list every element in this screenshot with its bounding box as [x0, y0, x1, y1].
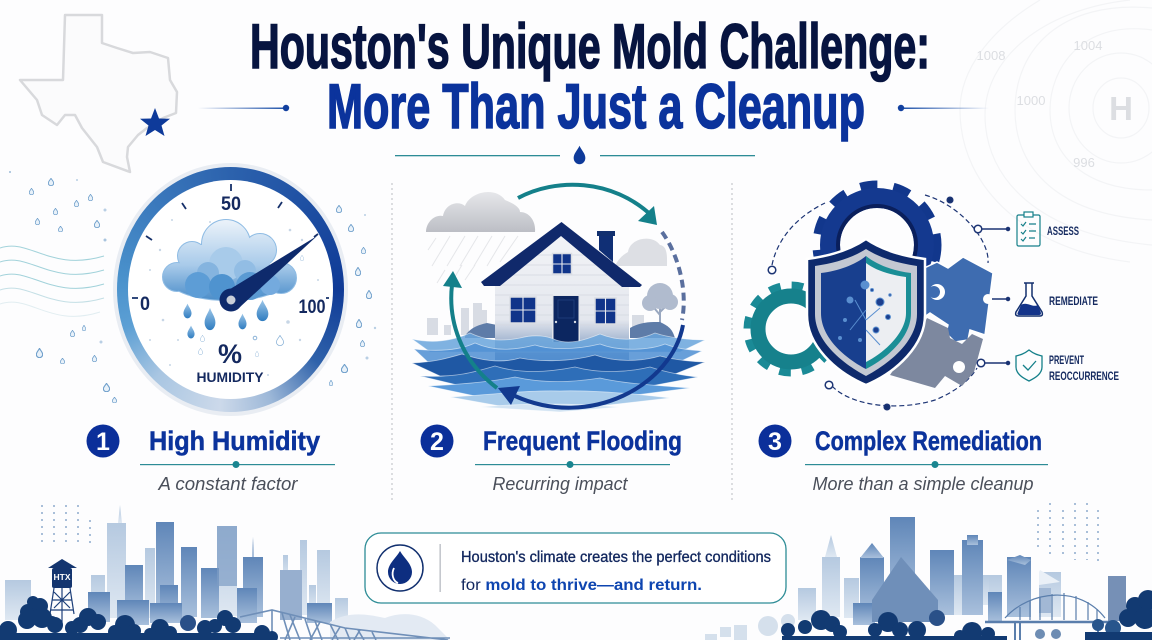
- top teal arrow: [518, 185, 657, 225]
- small cloud and tree: [615, 239, 678, 335]
- right skyline: [705, 517, 1152, 640]
- far hills: [330, 614, 450, 640]
- callout text: [461, 549, 771, 594]
- mid buildings: [853, 517, 1126, 625]
- left teal arrow: [443, 271, 497, 388]
- icon: flask: [1016, 283, 1042, 316]
- process labels: REMEDIATE: [1049, 296, 1098, 308]
- far buildings: [798, 535, 1061, 620]
- number badge 3: [758, 424, 792, 458]
- trees: [0, 596, 278, 640]
- needle: [220, 236, 317, 312]
- dial numbers: [140, 194, 326, 318]
- process labels: PREVENT: [1049, 355, 1084, 367]
- icon: water drop badge: [377, 545, 423, 591]
- bridge: [240, 610, 450, 640]
- teal gear: [750, 288, 832, 370]
- pressure labels: 1004: [1074, 38, 1102, 53]
- dial numbers: 100: [298, 297, 326, 318]
- scattered droplets: [9, 171, 376, 403]
- dial numbers: 0: [140, 294, 150, 315]
- low hills and buildings: [705, 614, 795, 640]
- cycle arrows: [443, 185, 684, 408]
- house: [481, 222, 642, 360]
- water tower HTX: [48, 559, 77, 625]
- rain columns: [42, 503, 1098, 562]
- process labels: ASSESS: [1047, 226, 1079, 238]
- number badge 1: 1: [96, 428, 110, 456]
- subtext 1: A constant factor: [157, 474, 299, 494]
- icon: clipboard: [1017, 212, 1040, 246]
- far buildings: [5, 505, 348, 623]
- puzzle piece gray: [890, 318, 983, 388]
- humidity waves: [0, 246, 104, 316]
- flood water: [412, 333, 705, 412]
- heading 1: High Humidity: [149, 426, 320, 456]
- column dividers: [392, 183, 732, 503]
- dial numbers: 50: [221, 194, 241, 215]
- orbit dashed ring: [772, 195, 988, 406]
- callout divider: [440, 544, 441, 592]
- number badge 1: [86, 424, 120, 458]
- bridge: [985, 593, 1110, 640]
- small droplets: [198, 255, 304, 357]
- pressure labels: 996: [1073, 155, 1095, 170]
- distant city: [427, 303, 644, 335]
- water tower HTX: HTX: [54, 572, 71, 582]
- blue gear: [821, 189, 933, 301]
- number badge 2: [420, 424, 454, 458]
- bottom blue arrow: [498, 325, 683, 408]
- rain: [428, 236, 518, 285]
- texas map with houston star: [20, 15, 177, 172]
- subtext 3: More than a simple cleanup: [812, 474, 1034, 494]
- callout box: [365, 533, 786, 603]
- pressure labels: H: [1109, 90, 1133, 127]
- number badge 2: 2: [430, 428, 444, 456]
- door: [552, 295, 580, 342]
- process labels: REOCCURRENCE: [1049, 371, 1119, 383]
- title flank lines: [198, 105, 989, 111]
- cloud icon: [163, 220, 296, 300]
- rain cloud: [426, 192, 535, 232]
- title divider with drop: [395, 146, 755, 164]
- callout text: Houston's climate creates the perfect conditions: [461, 549, 771, 566]
- pressure labels: [977, 38, 1133, 170]
- title: [250, 12, 930, 142]
- pressure labels: 1000: [1017, 93, 1045, 108]
- left skyline: [0, 505, 450, 640]
- puzzle piece blue: [920, 257, 993, 342]
- percent humidity label: HUMIDITY: [196, 369, 264, 385]
- raindrops: [183, 300, 268, 338]
- gauge specks: [149, 219, 319, 376]
- gauge contents: [132, 184, 329, 385]
- gauge dial ring: [113, 163, 348, 416]
- star: houston: [140, 108, 170, 136]
- chimney: [599, 235, 613, 262]
- icon: check shield: [1016, 350, 1042, 381]
- heading 2: Frequent Flooding: [483, 426, 682, 456]
- shield: [807, 239, 925, 385]
- weather map contours: [960, 0, 1152, 262]
- percent humidity label: %: [218, 339, 242, 369]
- number badge 3: 3: [768, 428, 782, 456]
- remediation illustration: [750, 189, 1119, 410]
- rule 1: [140, 461, 335, 468]
- mid buildings: [88, 522, 332, 625]
- rule 3: [805, 461, 1048, 468]
- pressure labels: 1008: [977, 48, 1005, 63]
- flood illustration: [412, 185, 705, 412]
- windows: [510, 254, 616, 324]
- heading 3: Complex Remediation: [815, 426, 1042, 456]
- rule 2: [475, 461, 670, 468]
- process labels: [1047, 226, 1119, 383]
- title line 2: More Than Just a Cleanup: [327, 72, 865, 142]
- mold network: [838, 281, 891, 345]
- dashed segment: [662, 232, 684, 320]
- percent humidity label: [196, 339, 264, 385]
- connector nodes: [768, 197, 1010, 410]
- column 2 caption: [420, 424, 682, 494]
- column 1 caption: [86, 424, 335, 494]
- trees: [781, 590, 1152, 640]
- callout text: for mold to thrive—and return.: [461, 577, 702, 594]
- column 3 caption: [758, 424, 1048, 494]
- subtext 2: Recurring impact: [492, 474, 628, 494]
- gauge ticks: [132, 184, 329, 298]
- roof: [481, 222, 642, 287]
